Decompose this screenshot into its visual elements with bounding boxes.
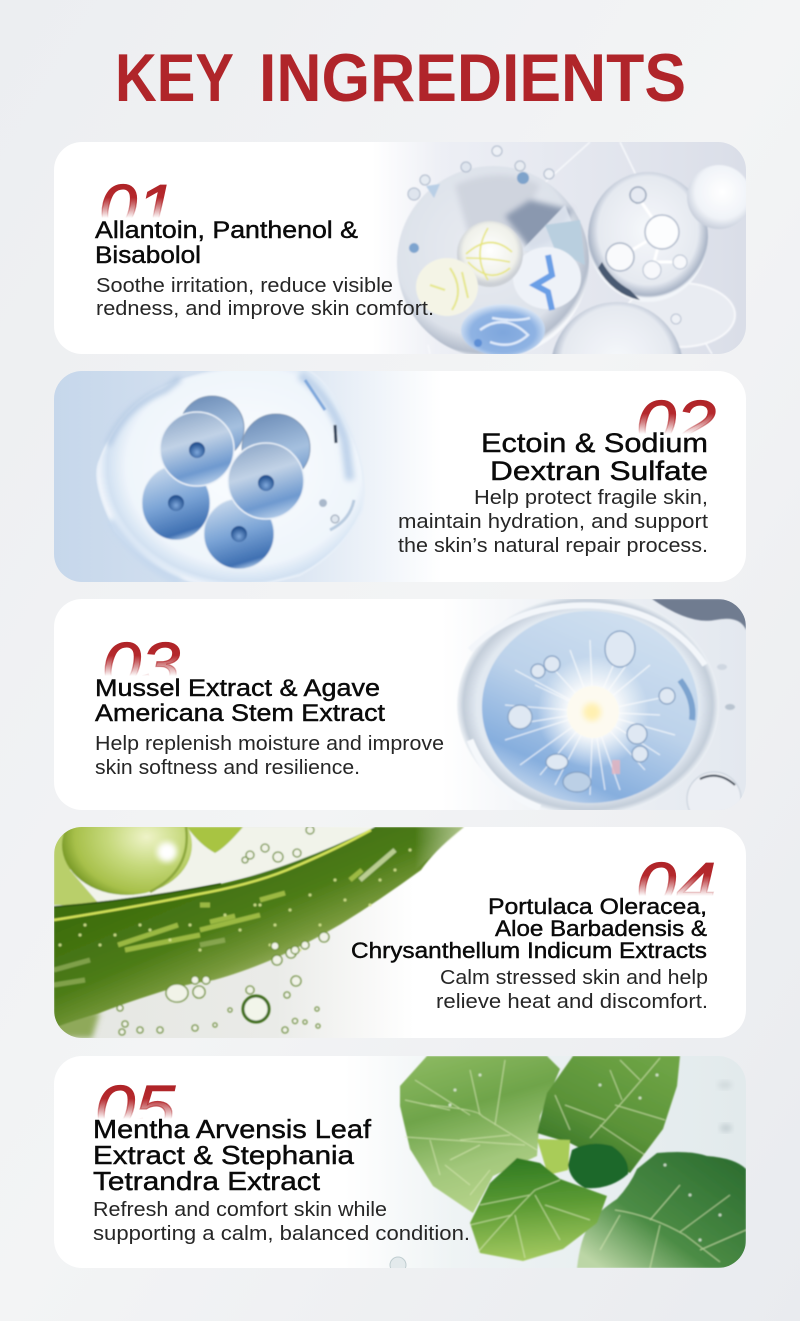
ingredient 4 name [351,894,707,963]
ingredient 4 name: Portulaca Oleracea, [488,894,707,919]
ingredient 5 description [93,1199,470,1245]
ingredient 5 name: Tetrandra Extract [93,1166,321,1196]
panel: ingredient 2 [54,365,746,590]
panel: ingredient 4 [54,795,746,1038]
image: glass bubbles with capsules [396,142,746,354]
image: blue cells in droplet [97,365,364,590]
ingredient 1 description: redness, and improve skin comfort. [96,298,434,320]
ingredient 3 description: skin softness and resilience. [95,757,360,779]
ingredient 5 description: Refresh and comfort skin while [93,1199,387,1221]
ingredient 1 name: Allantoin, Panthenol & [95,217,358,244]
panel: ingredient 1 [54,142,746,354]
card 3 background [54,599,746,810]
ingredient 4 description: relieve heat and discomfort. [436,991,708,1013]
ingredient 2 description: the skin’s natural repair process. [398,535,708,557]
ingredient 4 description [436,967,708,1013]
panel: ingredient 3 [54,595,746,826]
ingredient 5 name: Extract & Stephania [93,1140,355,1170]
ingredient 2 description: Help protect fragile skin, [474,487,708,509]
ingredient 1 name [95,217,358,269]
ingredient 5 name [93,1114,372,1196]
ingredient 3 name: Americana Stem Extract [95,700,385,727]
ingredient 2 name [481,428,708,486]
number 02: 02 [636,389,716,458]
ingredient 4 name: Chrysanthellum Indicum Extracts [351,938,707,963]
ingredient 2 name: Dextran Sulfate [490,456,708,486]
ingredient 2 description: maintain hydration, and support [398,511,708,533]
ingredient 1 description: Soothe irritation, reduce visible [96,275,393,297]
number 04: 04 [636,851,716,920]
image: green aloe gel [54,827,464,1038]
title: INGREDIENTS [259,40,686,116]
title: KEY [115,40,234,116]
number 05: 05 [95,1074,176,1143]
ingredient 2 name: Ectoin & Sodium [481,428,708,458]
card 1 background [54,142,746,354]
card 2 background [54,371,746,582]
ingredient 1 name: Bisabolol [95,242,201,269]
number 03: 03 [102,631,180,700]
number 01: 01 [99,173,175,242]
card 5 background [54,1056,746,1268]
ingredient 3 name: Mussel Extract & Agave [95,675,380,702]
ingredient 5 description: supporting a calm, balanced condition. [93,1223,470,1245]
ingredient 2 description [398,487,708,557]
ingredient 3 description [95,733,444,779]
panel: ingredient 5 [54,1056,746,1273]
ingredient 4 name: Aloe Barbadensis & [495,916,707,941]
image: mint leaves [390,1056,746,1273]
image: glowing sphere [457,595,746,826]
ingredient 3 description: Help replenish moisture and improve [95,733,444,755]
ingredient 1 description [96,275,434,320]
ingredient 4 description: Calm stressed skin and help [440,967,708,989]
ingredient 3 name [95,675,385,727]
ingredient 5 name: Mentha Arvensis Leaf [93,1114,372,1144]
card 4 background [54,827,746,1038]
